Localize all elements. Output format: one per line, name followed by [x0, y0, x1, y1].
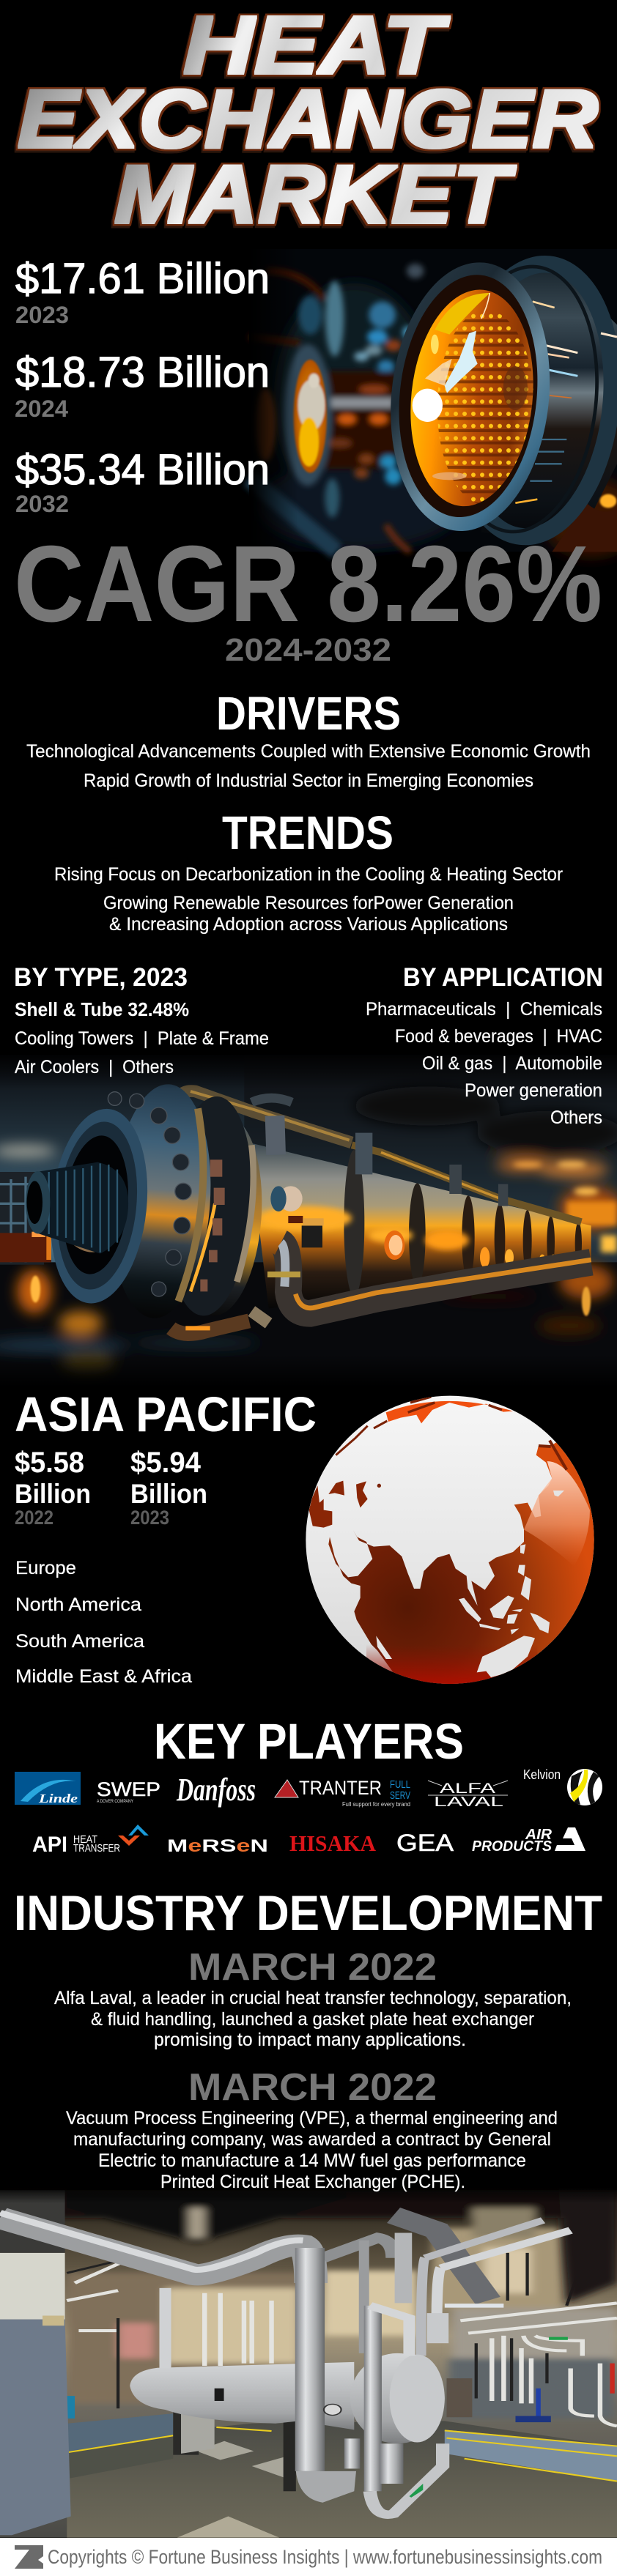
panel: by application: Oil & gas | Automobile	[422, 1053, 602, 1074]
logo: alfa laval	[428, 1781, 508, 1809]
panel: trends: Rising Focus on Decarbonization in the Cooling & Heating Sector	[54, 864, 563, 885]
logo: tranter	[275, 1777, 410, 1808]
machine lens ring	[391, 262, 550, 531]
panel: by type: Air Coolers | Others	[15, 1057, 174, 1077]
floor and reflections	[0, 1262, 617, 1394]
panel: trends	[54, 806, 563, 935]
image: industrial plant with heat exchanger	[0, 2190, 617, 2538]
image: heat exchanger pipeline at sunset	[0, 1047, 617, 1398]
panel: drivers: Rapid Growth of Industrial Sector in Emerging Economies	[84, 771, 533, 791]
logo: danfoss: Danfoss	[176, 1772, 256, 1808]
background plant structure	[0, 1172, 51, 1265]
market size 2032	[15, 446, 270, 517]
value 2022	[15, 1447, 91, 1529]
lower pipe run	[171, 1243, 591, 1334]
islands and australia	[376, 1491, 564, 1677]
sky and clouds	[0, 1055, 617, 1299]
ocean	[328, 1441, 601, 1690]
title	[18, 0, 598, 240]
panel: by type	[14, 963, 269, 1077]
title: MARKET	[114, 149, 517, 240]
exchanger body sections	[249, 1143, 591, 1309]
value 2023: Billion	[130, 1479, 207, 1509]
footer logo	[15, 2545, 43, 2569]
value 2022: $5.58	[15, 1447, 84, 1479]
logo: linde: Linde	[38, 1792, 78, 1805]
event: march 2022 vpe	[66, 2066, 558, 2192]
panel: by application: Food & beverages | HVAC	[395, 1026, 602, 1047]
logo: swep: SWEP	[97, 1778, 160, 1800]
panel: trends: & Increasing Adoption across Various Applications	[109, 914, 508, 935]
panel: drivers: Technological Advancements Coupled with Extensive Economic Growth	[26, 741, 591, 762]
value 2023	[130, 1447, 207, 1529]
logo: api heat transfer: API	[32, 1833, 67, 1857]
heading: key players: KEY PLAYERS	[154, 1713, 464, 1770]
panel: by application: BY APPLICATION	[403, 963, 603, 992]
logo: air products	[472, 1827, 585, 1855]
market size 2032: 2032	[15, 491, 69, 517]
value 2022: 2022	[15, 1507, 53, 1529]
logo: gea: GEA	[396, 1830, 454, 1856]
event: march 2022 vpe: Printed Circuit Heat Exchanger (PCHE).	[160, 2172, 465, 2192]
logo: tranter: TRANTER	[299, 1777, 382, 1799]
logo: alfa laval: LAVAL	[434, 1794, 503, 1809]
logo: tranter: SERV	[390, 1789, 410, 1802]
logo: air products: AIR	[525, 1827, 553, 1843]
pressure gauge	[270, 1186, 324, 1247]
footer bar	[0, 2538, 617, 2576]
logo: api heat transfer: TRANSFER	[73, 1842, 120, 1855]
event: march 2022 alfa laval: promising to impact many applications.	[154, 2030, 466, 2050]
icon: globe	[306, 1396, 601, 1690]
other regions: North America	[15, 1595, 141, 1615]
market size 2024: 2024	[15, 396, 68, 422]
event: march 2022 vpe: Electric to manufacture a 14 MW fuel gas performance	[98, 2150, 526, 2171]
title: EXCHANGER	[18, 73, 598, 165]
panel: by application: Others	[550, 1107, 602, 1128]
logo: linde	[15, 1772, 81, 1805]
logo: swep: A DOVER COMPANY	[97, 1800, 133, 1804]
logo: alfa laval: ALFA	[440, 1781, 496, 1797]
event: march 2022 vpe: Vacuum Process Engineering (VPE), a thermal engineering and	[66, 2108, 558, 2128]
logo: api heat transfer: HEAT	[73, 1833, 97, 1846]
ceiling	[0, 2190, 617, 2303]
machine barrel	[436, 256, 617, 552]
other regions: South America	[15, 1631, 144, 1652]
market size 2023	[15, 255, 270, 328]
logo: api heat transfer	[32, 1825, 149, 1857]
title: HEAT	[183, 0, 450, 91]
vertical pipes and fittings	[295, 2248, 448, 2514]
panel: drivers: DRIVERS	[216, 687, 401, 740]
value 2023: $5.94	[130, 1447, 202, 1479]
logo: kelvion: Kelvion	[523, 1767, 561, 1782]
market size 2024	[15, 349, 270, 422]
event: march 2022 alfa laval	[54, 1946, 572, 2050]
market size 2024: $18.73 Billion	[15, 349, 270, 396]
value 2022: Billion	[15, 1479, 91, 1509]
panel: industry development	[14, 1885, 602, 2192]
plant background clutter	[67, 2193, 617, 2426]
front plate and nozzle	[26, 1104, 157, 1308]
event: march 2022 alfa laval: MARCH 2022	[188, 1946, 437, 1989]
floor	[67, 2413, 617, 2538]
panel: by type: Shell & Tube 32.48%	[15, 998, 189, 1020]
logo: tranter: FULL	[390, 1778, 410, 1791]
arctic ocean	[386, 1401, 513, 1423]
panel: trends: Growing Renewable Resources forPower Generation	[103, 893, 514, 913]
overhead pipe	[0, 2213, 571, 2368]
logo: kelvion	[523, 1767, 602, 1805]
market size 2023: 2023	[15, 302, 69, 328]
event: march 2022 alfa laval: Alfa Laval, a leader in crucial heat transfer technology, separation,	[54, 1988, 572, 2008]
other regions	[15, 1558, 192, 1687]
panel: by application	[366, 963, 603, 1128]
other regions: Europe	[15, 1558, 76, 1578]
logo: tranter: Full support for every brand	[342, 1801, 410, 1808]
back flange with bolts	[104, 1081, 268, 1321]
panel: by type: BY TYPE, 2023	[14, 963, 188, 992]
logo: hisaka: HISAKA	[289, 1830, 377, 1856]
event: march 2022 alfa laval: & fluid handling, launched a gasket plate heat exchanger	[91, 2009, 534, 2030]
market size 2023: $17.61 Billion	[15, 255, 270, 302]
event: march 2022 vpe: MARCH 2022	[188, 2066, 437, 2109]
panel: trends: TRENDS	[222, 806, 394, 859]
panel: by application: Power generation	[465, 1080, 602, 1101]
pillar	[0, 2190, 71, 2535]
top manifold pipe	[176, 1091, 581, 1222]
value 2023: 2023	[130, 1507, 169, 1529]
inland seas	[309, 1481, 368, 1528]
logo: air products: PRODUCTS	[472, 1838, 553, 1855]
market size 2032: $35.34 Billion	[15, 446, 270, 494]
logo: mersen: M eRS eN	[167, 1836, 268, 1856]
event: march 2022 vpe: manufacturing company, was awarded a contract by General	[73, 2129, 551, 2150]
image: heat exchanger lens machine	[249, 249, 617, 557]
heat exchanger tank	[130, 2353, 445, 2491]
panel: asia pacific	[15, 1387, 317, 1687]
panel: asia pacific: ASIA PACIFIC	[15, 1387, 317, 1442]
panel: by type: Cooling Towers | Plate & Frame	[15, 1028, 269, 1049]
other regions: Middle East & Africa	[15, 1666, 192, 1687]
panel: drivers	[26, 687, 591, 791]
CAGR: 2024-2032	[225, 632, 391, 668]
panel: by application: Pharmaceuticals | Chemicals	[366, 999, 602, 1020]
